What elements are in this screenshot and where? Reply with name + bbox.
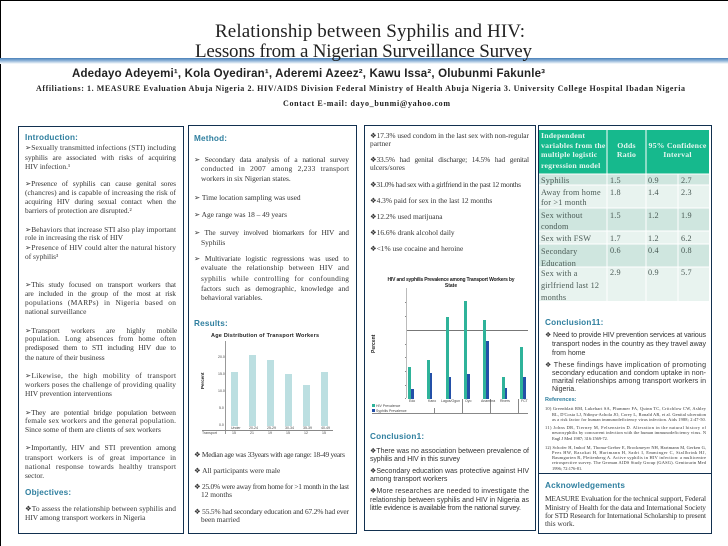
heading: references: References: [545, 397, 577, 403]
table: logistic regression: Education [541, 259, 576, 268]
text block: method: workers in six Nigerian states. [201, 174, 291, 183]
bar chart: prevalence by state: Lagos/Ogun [441, 399, 460, 403]
text block: introduction: national surveillance [25, 307, 87, 316]
text block: conclusion 11: marital relationships among transport workers in [552, 378, 706, 385]
text block: findings: partner [370, 139, 391, 148]
table: logistic regression: 1.8 [610, 188, 621, 197]
table: logistic regression: Sex with a [541, 269, 578, 278]
bar chart: age distribution: 30-34 [285, 426, 294, 430]
table: logistic regression: 1.5 [610, 176, 621, 185]
table: logistic regression: 0.6 [610, 246, 621, 255]
bar chart: age distribution: 15 [286, 431, 290, 435]
text block: findings: ❖16.6% drank alcohol daily [370, 228, 455, 237]
bar chart: age distribution: 40-49 [321, 426, 330, 430]
panel: introduction and objectives [18, 126, 184, 534]
text block: conclusion 1: little evidence is available from the national survey. [370, 505, 521, 512]
text block: method [194, 155, 350, 302]
bar chart: age distribution: 12 [304, 431, 308, 435]
table: logistic regression: for >1 month [541, 198, 587, 207]
table: logistic regression: regression model [541, 161, 601, 170]
bar chart: prevalence by state: Kano [428, 399, 436, 403]
text block: method: ➢ Secondary data analysis of a national survey [194, 155, 349, 164]
text block: introduction: ➢Behaviors that increase STI also play important [25, 225, 177, 234]
text block: findings [370, 131, 530, 253]
text block: findings: ulcers/sores [370, 163, 405, 172]
text block: introduction: sector. [25, 471, 44, 480]
text block: introduction: (chancres) and is capable of increasing the risk of [25, 188, 177, 197]
text block: introduction: ➢Transport workers are highly mobile [25, 326, 178, 335]
bar chart: age distribution: 10.0 [218, 389, 225, 393]
text block: introduction: are included in the group of the most at risk [25, 289, 176, 298]
bar chart: prevalence by state: Oyo [465, 399, 471, 403]
text block: findings: ❖<1% use cocaine and heroine [370, 244, 464, 253]
bar chart: age distribution: 20.0 [218, 355, 225, 359]
text block: introduction: transport workers is of great importance in [25, 453, 176, 462]
title: Relationship between Syphilis and HIV: [215, 21, 525, 42]
table: logistic regression: girlfriend last 12 [541, 281, 599, 290]
text block: method: behavioral variables. [201, 293, 263, 302]
text block: introduction: the nature of their business [25, 353, 105, 362]
bar chart: prevalence by state: FCT [521, 399, 529, 403]
text block: references: neurosyphilis by concurrent infection with the human immunodeficiency virus. N [552, 430, 707, 435]
text block: references: Pees HW, Rasokat H, Hartmann H, Sadri I, Emminger C, Stallbrink HJ, [552, 450, 706, 456]
text block: introduction: HIV prevention interventions [25, 389, 112, 398]
text block: references: Engl J Med 1987; 316:1569-72. [552, 436, 608, 441]
text block: introduction: ➢Presence of syphilis can cause genital sores [25, 179, 176, 188]
bar chart: age distribution: 15.0 [218, 372, 225, 376]
text block: conclusion 11: ❖ Need to provide HIV prevention services at various [545, 331, 706, 339]
bar chart: prevalence by state [371, 277, 529, 414]
table: logistic regression: 95% Confidence [648, 141, 707, 150]
bar chart: prevalence by state: Rivers [500, 399, 510, 403]
bar chart: age distribution: 5.0 [219, 406, 224, 410]
text block: results bullets: ❖ Median age was 33years with age range: 18-49 years [194, 450, 345, 459]
bar chart: prevalence by state: HIV Prevalence [376, 404, 400, 408]
bar chart: age distribution: 25-29 [267, 426, 276, 430]
text block: results bullets: ❖ 55.5% had secondary education and 67.2% had ever [194, 507, 350, 516]
text block: introduction: ➢Sexually transmitted infections (STI) including [25, 143, 176, 152]
text block: method: evaluate the relationship between HIV and [201, 263, 349, 272]
bar chart: age distribution: 20-24 [249, 426, 258, 430]
authors: Adedayo Adeyemi¹, Kola Oyediran¹, Aderemi Azeez², Kawu Issa², Olubunmi Fakunle³ [72, 68, 545, 80]
text block: findings: ❖33.5% had genital discharge; 14.5% had genital [370, 155, 529, 164]
text block: references: as a risk factor for human immunodeficiency virus infection. Aids 1988; 2:47-50. [552, 417, 706, 422]
text block: introduction: HIV infection.¹ [25, 162, 70, 171]
text block: introduction: workers poses the challenge of providing quality [25, 380, 176, 389]
text block: conclusion 11: secondary education and condom uptake in non- [552, 370, 707, 377]
bar chart: prevalence by state: Edo [409, 399, 415, 403]
bar chart: prevalence by state: Syphilis Prevalence [376, 409, 407, 413]
table: logistic regression: 1.5 [610, 211, 621, 220]
table: logistic regression: 0.8 [681, 246, 692, 255]
text block: conclusion 1: ❖More researches are needed to investigate the [370, 487, 529, 495]
text block: introduction: ➢Importantly, HIV and STI prevention among [25, 443, 176, 452]
panel: findings and conclusion [364, 126, 536, 530]
bar chart: age distribution: Percent [200, 372, 205, 389]
text block: references: 1996; 72:176-81. [552, 466, 582, 471]
bar chart: age distribution: 21 [250, 431, 254, 435]
bar chart: age distribution: Age Distribution of Transport Workers [211, 333, 319, 339]
text block: introduction: barriers of protection are disrupted.² [25, 206, 132, 215]
bar chart: age distribution [200, 333, 333, 435]
table: logistic regression: 0.4 [648, 246, 659, 255]
table: logistic regression: condom [541, 222, 569, 231]
title [195, 21, 532, 62]
text block: conclusion 1: ❖Secondary education was protective against HIV [370, 467, 529, 475]
table: logistic regression: Away from home [541, 188, 601, 197]
text block: objectives: HIV among transport workers in Nigeria [25, 513, 146, 522]
text block: acknowledgements [545, 494, 707, 528]
table: logistic regression: 1.9 [681, 211, 692, 220]
text block: introduction: ➢Likewise, the high mobility of transport [25, 371, 177, 380]
table: logistic regression: Independent [541, 131, 585, 140]
heading: conclusion 11: Conclusion11: [545, 318, 604, 327]
table: logistic regression: variables from the [541, 141, 606, 150]
bar chart: age distribution: 15 [232, 431, 236, 435]
table: logistic regression: Syphilis [541, 176, 569, 185]
text block: conclusion 1: among transport workers [370, 476, 448, 483]
text block: conclusion 11 [545, 331, 707, 393]
table: logistic regression: multiple logistic [541, 150, 598, 159]
table: logistic regression: 1.4 [648, 188, 659, 197]
table: logistic regression [539, 130, 709, 302]
affiliations: Affiliations: 1. MEASURE Evaluation Abuja Nigeria 2. HIV/AIDS Division Federal Ministry of Health Abuja Nigeria 3. University College Hospital Ibadan Nigeria [36, 84, 685, 93]
table: logistic regression: 2.7 [681, 176, 692, 185]
text block: conclusion 11: ❖ These findings have implication of promoting [545, 361, 706, 369]
header band [0, 58, 728, 64]
table: logistic regression: months [541, 293, 566, 302]
text block: method: ➢ The survey involved biomarkers for HIV and [194, 228, 349, 237]
table: logistic regression: Ratio [617, 150, 636, 159]
text block: introduction: population. Long absences from home often [25, 334, 176, 343]
text block: conclusion 1: syphilis and HIV in this survey [370, 456, 460, 463]
text block: method: ➢ Time location sampling was used [194, 193, 301, 202]
bar chart: prevalence by state: State [445, 283, 457, 289]
panel: acknowledgements [538, 474, 712, 534]
heading: method: Method: [194, 134, 227, 143]
heading: acknowledgements: Acknowledgements [545, 481, 625, 490]
table: logistic regression: Sex without [541, 211, 583, 220]
text block: findings: ❖12.2% used marijuana [370, 212, 443, 221]
text block: method: Syphilis [201, 238, 225, 247]
text block: findings: ❖4.3% paid for sex in the last 12 months [370, 196, 492, 205]
text block: conclusion 1: relationship between syphilis and HIV in Nigeria as [370, 497, 530, 504]
text block: introduction: ➢Presence of HIV could alter the natural history [25, 243, 176, 252]
table: logistic regression: Sex with FSW [541, 234, 591, 243]
text block: introduction: ➢This study focused on transport workers that [25, 280, 177, 289]
text block: method: ➢ Multivariate logistic regressions was used to [194, 254, 349, 263]
text block: method: ➢ Age range was 18 – 49 years [194, 210, 287, 219]
text block: introduction: syphilis are associated with risks of acquiring [25, 153, 176, 162]
text block: introduction: role in increasing the risk of HIV [25, 233, 124, 242]
heading: results: Results: [194, 319, 228, 328]
text block: findings: ❖17.3% used condom in the last sex with non-regular [370, 131, 530, 140]
text block: results bullets: been married [201, 515, 240, 524]
text block: introduction: acquiring HIV during sexual contact when the [25, 197, 177, 206]
table: logistic regression: 2.9 [610, 268, 621, 277]
table: logistic regression: 0.9 [648, 176, 659, 185]
text block: references: Baumgarten R, Plettenberg A. Active syphilis in HIV infection: a multicentre [552, 455, 706, 461]
bar chart: age distribution: 0.0 [219, 423, 224, 427]
bar chart: prevalence by state: Percent [371, 334, 377, 353]
table: logistic regression: 1.2 [648, 211, 659, 220]
text block: references: retrospective survey. The German AIDS Study Group (GASG). Genitourin Med [552, 460, 707, 465]
text block: results bullets: ❖ 25.0% were away from home for >1 month in the last [194, 482, 350, 491]
title: Lessons from a Nigerian Surveillance Survey [195, 41, 532, 62]
text block: acknowledgements: Ministry of Health for the data and International Society [545, 503, 706, 512]
table: logistic regression: 1.7 [610, 234, 621, 243]
text block: method: factors such as demographic, knowledge and [201, 284, 349, 293]
text block: objectives: ❖To assess the relationship between syphilis and [25, 504, 176, 513]
text block: introduction [25, 143, 178, 480]
text block: findings: ❖31.0% had sex with a girlfriend in the past 12 months [370, 180, 521, 189]
text block: results bullets: 12 months [201, 490, 232, 499]
text block: introduction: of syphilis³ [25, 252, 59, 261]
contact email: Contact E-mail: dayo_bunmi@yahoo.com [283, 99, 450, 108]
panel: regression table and conclusion [538, 126, 712, 474]
table: logistic regression: Odds [617, 141, 636, 150]
text block: conclusion 11: Nigeria. [552, 386, 576, 393]
bar chart: age distribution: 15 [322, 431, 326, 435]
table: logistic regression: 5.7 [681, 268, 692, 277]
text block: objectives [25, 504, 176, 522]
bar chart: age distribution: 35-39 [303, 426, 312, 430]
text block: method: syphilis while controlling for confounding [201, 274, 349, 283]
text block: references: 11) Johns DR, Tierney M, Felsenstein D. Alteration in the natural history of [545, 425, 707, 431]
text block: introduction: national response towards healthy transport [25, 462, 177, 471]
text block: results bullets [194, 450, 350, 524]
table: logistic regression: 0.9 [648, 268, 659, 277]
bar chart: prevalence by state: HIV and syphilis Prevalence among Transport Workers by [388, 277, 515, 283]
text block: introduction: populations (MARPs) in Nigeria based on [25, 298, 176, 307]
table: logistic regression: 1.2 [648, 234, 659, 243]
text block: references: 10) Greenblatt RM, Lukehart SA, Plummer FA, Quinn TC, Critchlow CW, Ashley [545, 406, 707, 412]
panel: method and results [188, 126, 356, 534]
text block: acknowledgements: this work. [545, 519, 575, 528]
text block: conclusion 11: from home [552, 350, 586, 357]
bar chart: age distribution: Under [231, 426, 241, 430]
text block: method: conducted in 2007 among 2,233 transport [201, 164, 350, 173]
bar chart: prevalence by state: Anambra [481, 399, 495, 403]
text block: acknowledgements: for STD Research for International Scholarship to present [545, 511, 707, 520]
text block: introduction: ➢They are potential bridge population between [25, 408, 176, 417]
text block: introduction: female sex workers and the general population. [25, 416, 176, 425]
text block: references: RL, D'Costa LJ, Ndinya-Achola JO, Corey L, Ronald AR, et al. Genital ulceration [552, 412, 707, 418]
table: logistic regression: Interval [663, 150, 692, 159]
table: logistic regression: Secondary [541, 247, 578, 256]
text block: conclusion 11: transport nodes in the country as they travel away [552, 341, 706, 348]
text block: acknowledgements: MEASURE Evaluation for the technical support, Federal [545, 494, 706, 503]
bar chart: age distribution: Transport [202, 431, 217, 435]
text block: references [545, 406, 707, 471]
bar chart: age distribution: 19 [268, 431, 272, 435]
text block: introduction: Since some of them are clients of sex workers [25, 425, 161, 434]
text block: results bullets: ❖ All participants were male [194, 466, 281, 475]
heading: conclusion 1: Conclusion1: [370, 432, 424, 441]
text block: references: 12) Schofer H, Imhof M, Thoma-Greber E, Brockmeyer NH, Hartmann M, Gerken G, [545, 445, 706, 451]
table: logistic regression: 2.3 [681, 188, 692, 197]
heading: objectives: Objectives: [25, 488, 71, 497]
text block: conclusion 1 [370, 447, 530, 512]
heading: introduction: Introduction: [25, 133, 78, 142]
table: logistic regression: 6.2 [681, 234, 692, 243]
text block: introduction: predisposed them to STI including HIV due to [25, 343, 176, 352]
text block: conclusion 1: ❖There was no association between prevalence of [370, 447, 529, 455]
